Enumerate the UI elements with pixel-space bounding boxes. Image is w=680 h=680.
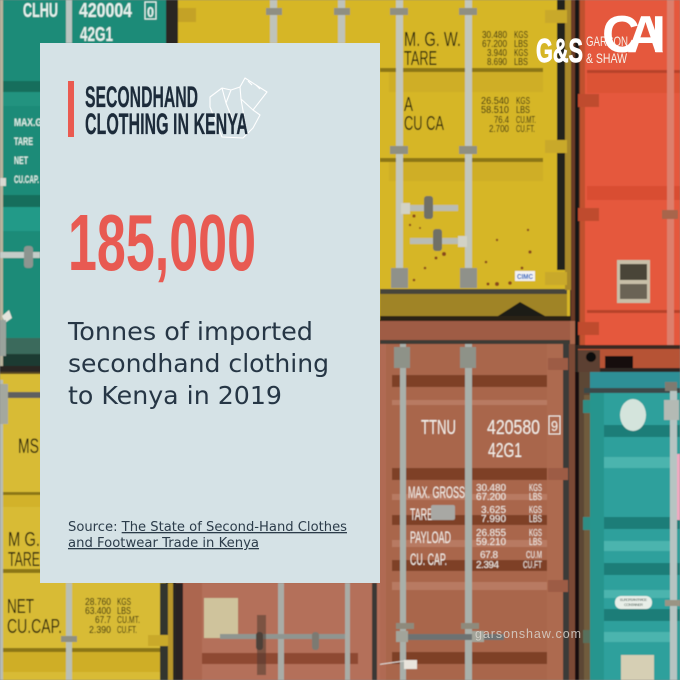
container: yellow top centre: CIMC: [517, 274, 533, 281]
logo: Garson & Shaw: G&S: [536, 32, 583, 69]
container: brown bottom centre: 42G1: [488, 440, 522, 462]
container: teal top left: 0: [147, 4, 154, 21]
container: yellow bottom left: CU.CAP.: [7, 616, 62, 638]
container: yellow bottom left: 2.390: [89, 625, 111, 636]
logo: CAI: CAI: [602, 6, 666, 64]
container: brown bottom centre: CU.FT: [523, 560, 542, 571]
container: brown bottom centre: 2.394: [476, 560, 499, 571]
container: red top right: [571, 0, 680, 388]
container: teal bottom right: EUROPEAN TRADE: [620, 597, 647, 602]
website watermark: garsonshaw.com: [475, 627, 581, 641]
container: brown bottom centre: TTNU: [421, 417, 456, 439]
heading: CLOTHING IN KENYA: [85, 108, 248, 141]
container: brown bottom centre: LBS: [529, 537, 542, 548]
container: yellow bottom left: 63.400: [85, 606, 111, 617]
container: yellow top centre: TARE: [404, 48, 437, 70]
container: brown bottom centre: PAYLOAD: [410, 528, 451, 547]
container: yellow top centre: LBS: [516, 105, 530, 116]
container: brown bottom centre: 67.200: [476, 492, 506, 503]
container: yellow bottom left: 67.7: [95, 615, 111, 626]
container: yellow top centre: M. G. W.: [404, 29, 461, 51]
container: yellow top centre: [170, 0, 571, 321]
container: yellow top centre: 26.540: [481, 96, 509, 107]
container: yellow bottom left: TARE: [8, 549, 40, 571]
container: brown bottom centre: 26.855: [476, 528, 506, 539]
big number: 185,000: [68, 198, 256, 287]
container: teal top left: NET: [14, 155, 28, 167]
container: yellow bottom left: CU.MT.: [117, 615, 140, 626]
container: brown bottom centre: TARE: [410, 505, 433, 524]
container: yellow bottom left: CU.FT.: [117, 625, 137, 636]
container: brown bottom centre: KGS: [529, 505, 542, 516]
accent bar: [68, 81, 74, 137]
container: yellow top centre: KGS: [514, 30, 528, 41]
container: brown bottom centre: 59.210: [476, 537, 506, 548]
container: yellow bottom left: 28.760: [85, 597, 111, 608]
container: teal top left: 420004: [79, 0, 133, 22]
container: yellow bottom left: [0, 372, 173, 680]
container: teal bottom right: [575, 372, 680, 680]
description text: [67, 317, 329, 410]
heading: [85, 81, 248, 141]
container: teal top left: TARE: [14, 136, 33, 148]
container: yellow top centre: 8.690: [487, 57, 507, 68]
container: teal bottom right: CONTAINER: [624, 602, 643, 607]
container: teal top left: CLHU: [23, 0, 58, 22]
description text: to Kenya in 2019: [68, 381, 282, 410]
icon: clothing line art: [210, 78, 267, 138]
heading: SECONDHAND: [85, 81, 198, 114]
container: yellow top centre: KGS: [516, 96, 530, 107]
source: Source: The State of Second-Hand Clothes: [68, 520, 347, 535]
source: [68, 520, 347, 551]
container: brown bottom centre: 9: [551, 418, 558, 435]
container: teal top left: [0, 0, 166, 366]
container: yellow top centre: A: [404, 94, 413, 116]
description text: Tonnes of imported: [67, 317, 313, 346]
source: and Footwear Trade in Kenya: [68, 536, 259, 551]
container: teal top left: CU.CAP.: [14, 174, 39, 186]
container: brown bottom centre: LBS: [529, 492, 542, 503]
container: yellow bottom left: M G.: [8, 529, 40, 551]
container: yellow top centre: 2.700: [489, 124, 509, 135]
container: brown bottom centre: [176, 321, 575, 680]
container: brown bottom centre: KGS: [529, 528, 542, 539]
container: brown bottom centre: 420580: [487, 417, 540, 439]
container: teal top left: 42G1: [80, 24, 113, 46]
container: yellow top centre: 58.510: [481, 105, 509, 116]
container: brown bottom centre: CU. CAP.: [410, 550, 447, 569]
container: teal top left: MAX.G: [14, 117, 42, 129]
container: yellow bottom left: MS: [18, 435, 39, 458]
logo: Garson & Shaw: & SHAW: [586, 50, 628, 66]
container: yellow top centre: 30.480: [482, 30, 507, 41]
container: yellow bottom left: NET: [7, 596, 34, 618]
container: yellow bottom left: LBS: [117, 606, 131, 617]
container: yellow top centre: CU.FT.: [516, 124, 535, 135]
container: brown bottom centre: 67.8: [480, 550, 498, 561]
container: yellow top centre: KGS: [514, 48, 528, 59]
container: yellow top centre: LBS: [514, 57, 528, 68]
container: yellow top centre: 67.200: [482, 39, 507, 50]
container: yellow top centre: CU.MT.: [516, 115, 536, 126]
description text: secondhand clothing: [68, 349, 329, 378]
container: brown bottom centre: KGS: [529, 483, 542, 494]
container: yellow top centre: 3.940: [487, 48, 507, 59]
container: yellow bottom left: KGS: [117, 597, 131, 608]
logo: Garson & Shaw: GARSON: [586, 33, 628, 49]
panel: main statistic card: [40, 43, 380, 583]
container: brown bottom centre: 7.990: [481, 514, 506, 525]
container: brown bottom centre: CU.M: [526, 550, 542, 561]
container: brown bottom centre: 30.480: [476, 483, 506, 494]
container: yellow top centre: 76.4: [494, 115, 509, 126]
container: yellow top centre: LBS: [514, 39, 528, 50]
container: brown bottom centre: LBS: [529, 514, 542, 525]
container: yellow top centre: CU CA: [404, 113, 444, 135]
container: brown bottom centre: 3.625: [481, 505, 506, 516]
lower left part of brown container: [176, 583, 380, 680]
container: brown bottom centre: MAX. GROSS: [408, 483, 465, 502]
